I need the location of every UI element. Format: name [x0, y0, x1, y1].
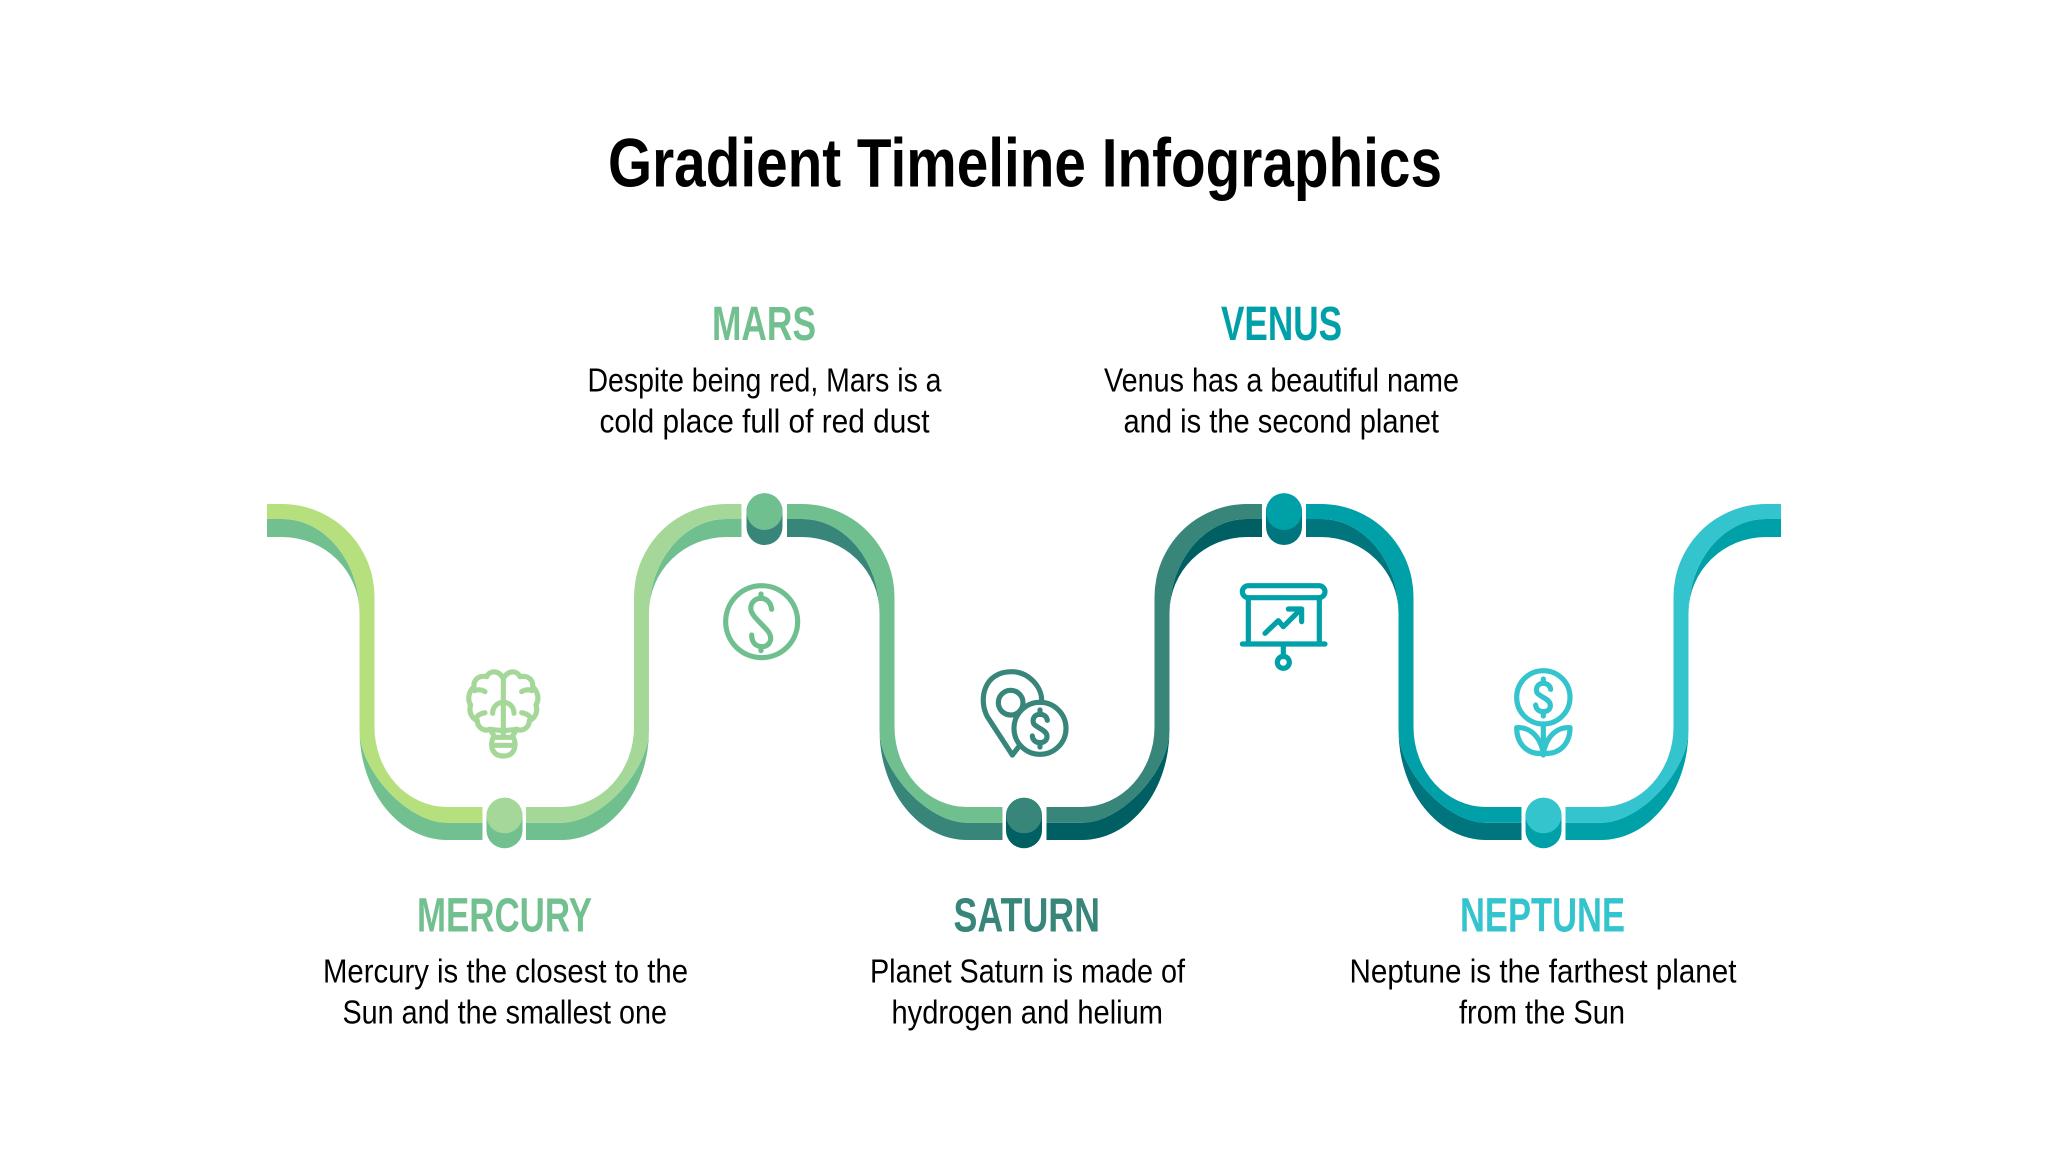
- timeline ribbon: [267, 493, 1781, 848]
- text block: Mars: cold place full of red dust: [600, 403, 930, 440]
- panel: Saturn: [870, 890, 1186, 1031]
- ribbon segment 3: [787, 504, 1002, 840]
- icon: dollar coin: [726, 586, 798, 658]
- ribbon segment 6: [1566, 504, 1781, 840]
- icon: location pin with coin: [983, 672, 1066, 755]
- ribbon segment 4: [1046, 504, 1262, 840]
- panel: Mercury: [323, 890, 688, 1031]
- text block: Mars: [588, 362, 942, 440]
- heading: Venus: VENUS: [1221, 298, 1342, 351]
- text block: Saturn: hydrogen and helium: [892, 994, 1163, 1031]
- text block: Venus: Venus has a beautiful name: [1104, 362, 1459, 399]
- text block: Saturn: [870, 953, 1186, 1031]
- text block: Neptune: [1350, 953, 1736, 1031]
- heading: Mercury: MERCURY: [417, 890, 592, 943]
- heading: Neptune: NEPTUNE: [1460, 890, 1625, 943]
- heading: Mars: MARS: [712, 298, 816, 351]
- text block: Neptune: Neptune is the farthest planet: [1350, 953, 1736, 990]
- node: Saturn: [1006, 798, 1042, 848]
- text block: Mercury: [323, 953, 688, 1031]
- icon: brain bulb: [469, 672, 538, 756]
- text block: Mars: Despite being red, Mars is a: [588, 362, 942, 399]
- node: Mercury: [486, 798, 522, 848]
- node: Venus: [1266, 493, 1302, 545]
- text block: Venus: [1104, 362, 1459, 440]
- text block: Venus: and is the second planet: [1124, 403, 1439, 440]
- text block: Neptune: from the Sun: [1459, 994, 1625, 1031]
- ribbon segment 1: [267, 504, 482, 840]
- title: Gradient Timeline Infographics: [608, 125, 1442, 202]
- panel: Mars: [588, 298, 942, 440]
- node: Mars: [746, 493, 782, 545]
- ribbon segment 5: [1306, 504, 1522, 840]
- text block: Saturn: Planet Saturn is made of: [870, 953, 1186, 990]
- panel: Venus: [1104, 298, 1459, 440]
- panel: Neptune: [1350, 890, 1736, 1031]
- ribbon segment 2: [526, 504, 742, 840]
- text block: Mercury: Mercury is the closest to the: [323, 953, 688, 990]
- icon: money flower: [1517, 671, 1570, 755]
- icon: presentation board: [1242, 586, 1325, 668]
- heading: Saturn: SATURN: [954, 890, 1100, 943]
- node: Neptune: [1526, 798, 1562, 848]
- text block: Mercury: Sun and the smallest one: [342, 994, 667, 1031]
